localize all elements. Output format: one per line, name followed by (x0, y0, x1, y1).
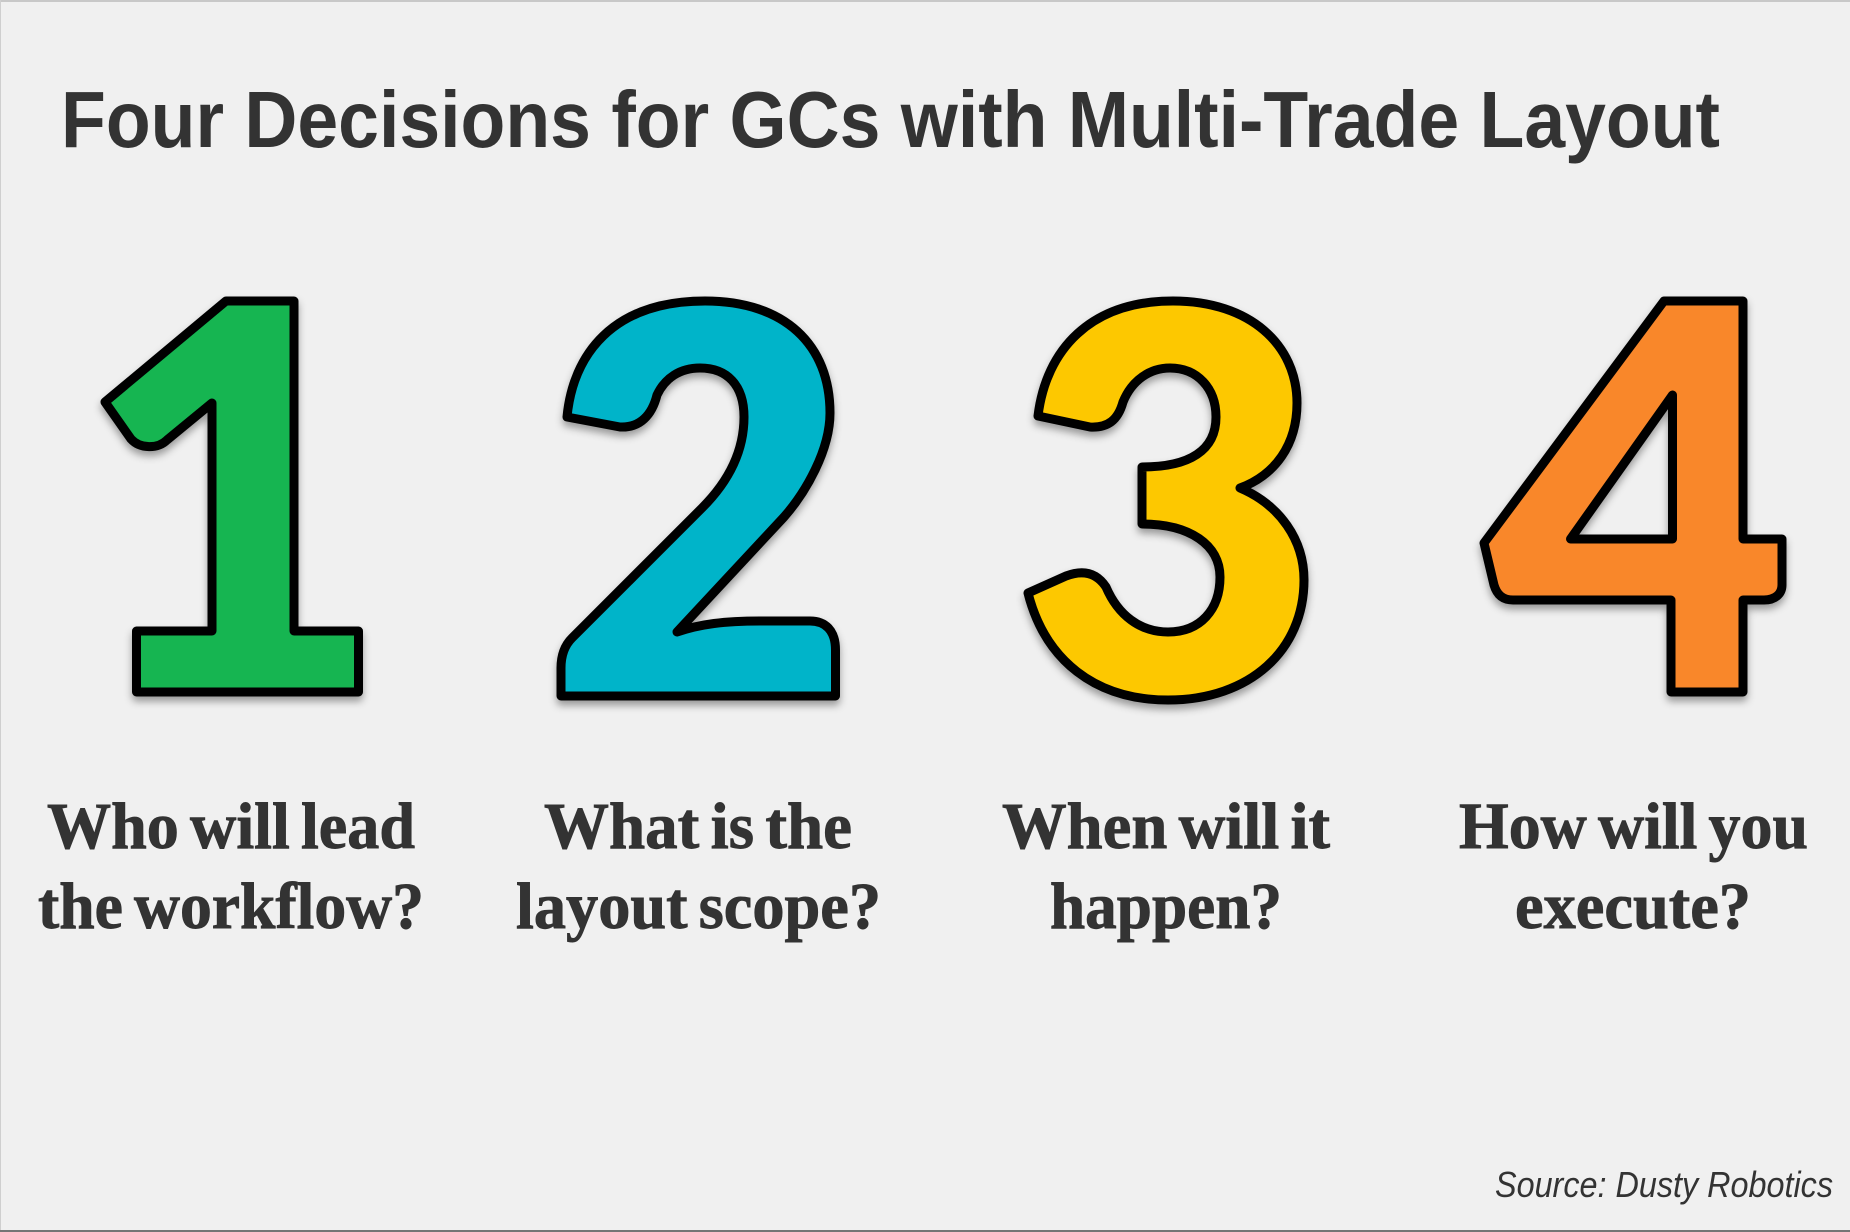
icon: number 3 (1028, 301, 1304, 700)
question 2 text: layout scope? (516, 870, 881, 943)
question 3 text: When will it (1002, 790, 1330, 863)
icon: number 1 (105, 301, 358, 692)
icon: number 4 (1484, 301, 1782, 692)
question 2 text: What is the (544, 790, 852, 863)
question 1 text (38, 790, 424, 943)
question 4 text: How will you (1459, 790, 1808, 863)
question 1 text: the workflow? (38, 870, 424, 943)
title: Four Decisions for GCs with Multi-Trade Layout (61, 75, 1720, 164)
question 4 text (1459, 790, 1808, 943)
question 1 text: Who will lead (47, 790, 415, 863)
icon: number 2 (561, 301, 836, 696)
question 4 text: execute? (1515, 870, 1751, 943)
question 3 text: happen? (1050, 870, 1282, 943)
question 3 text (1002, 790, 1330, 943)
question 2 text (516, 790, 881, 943)
